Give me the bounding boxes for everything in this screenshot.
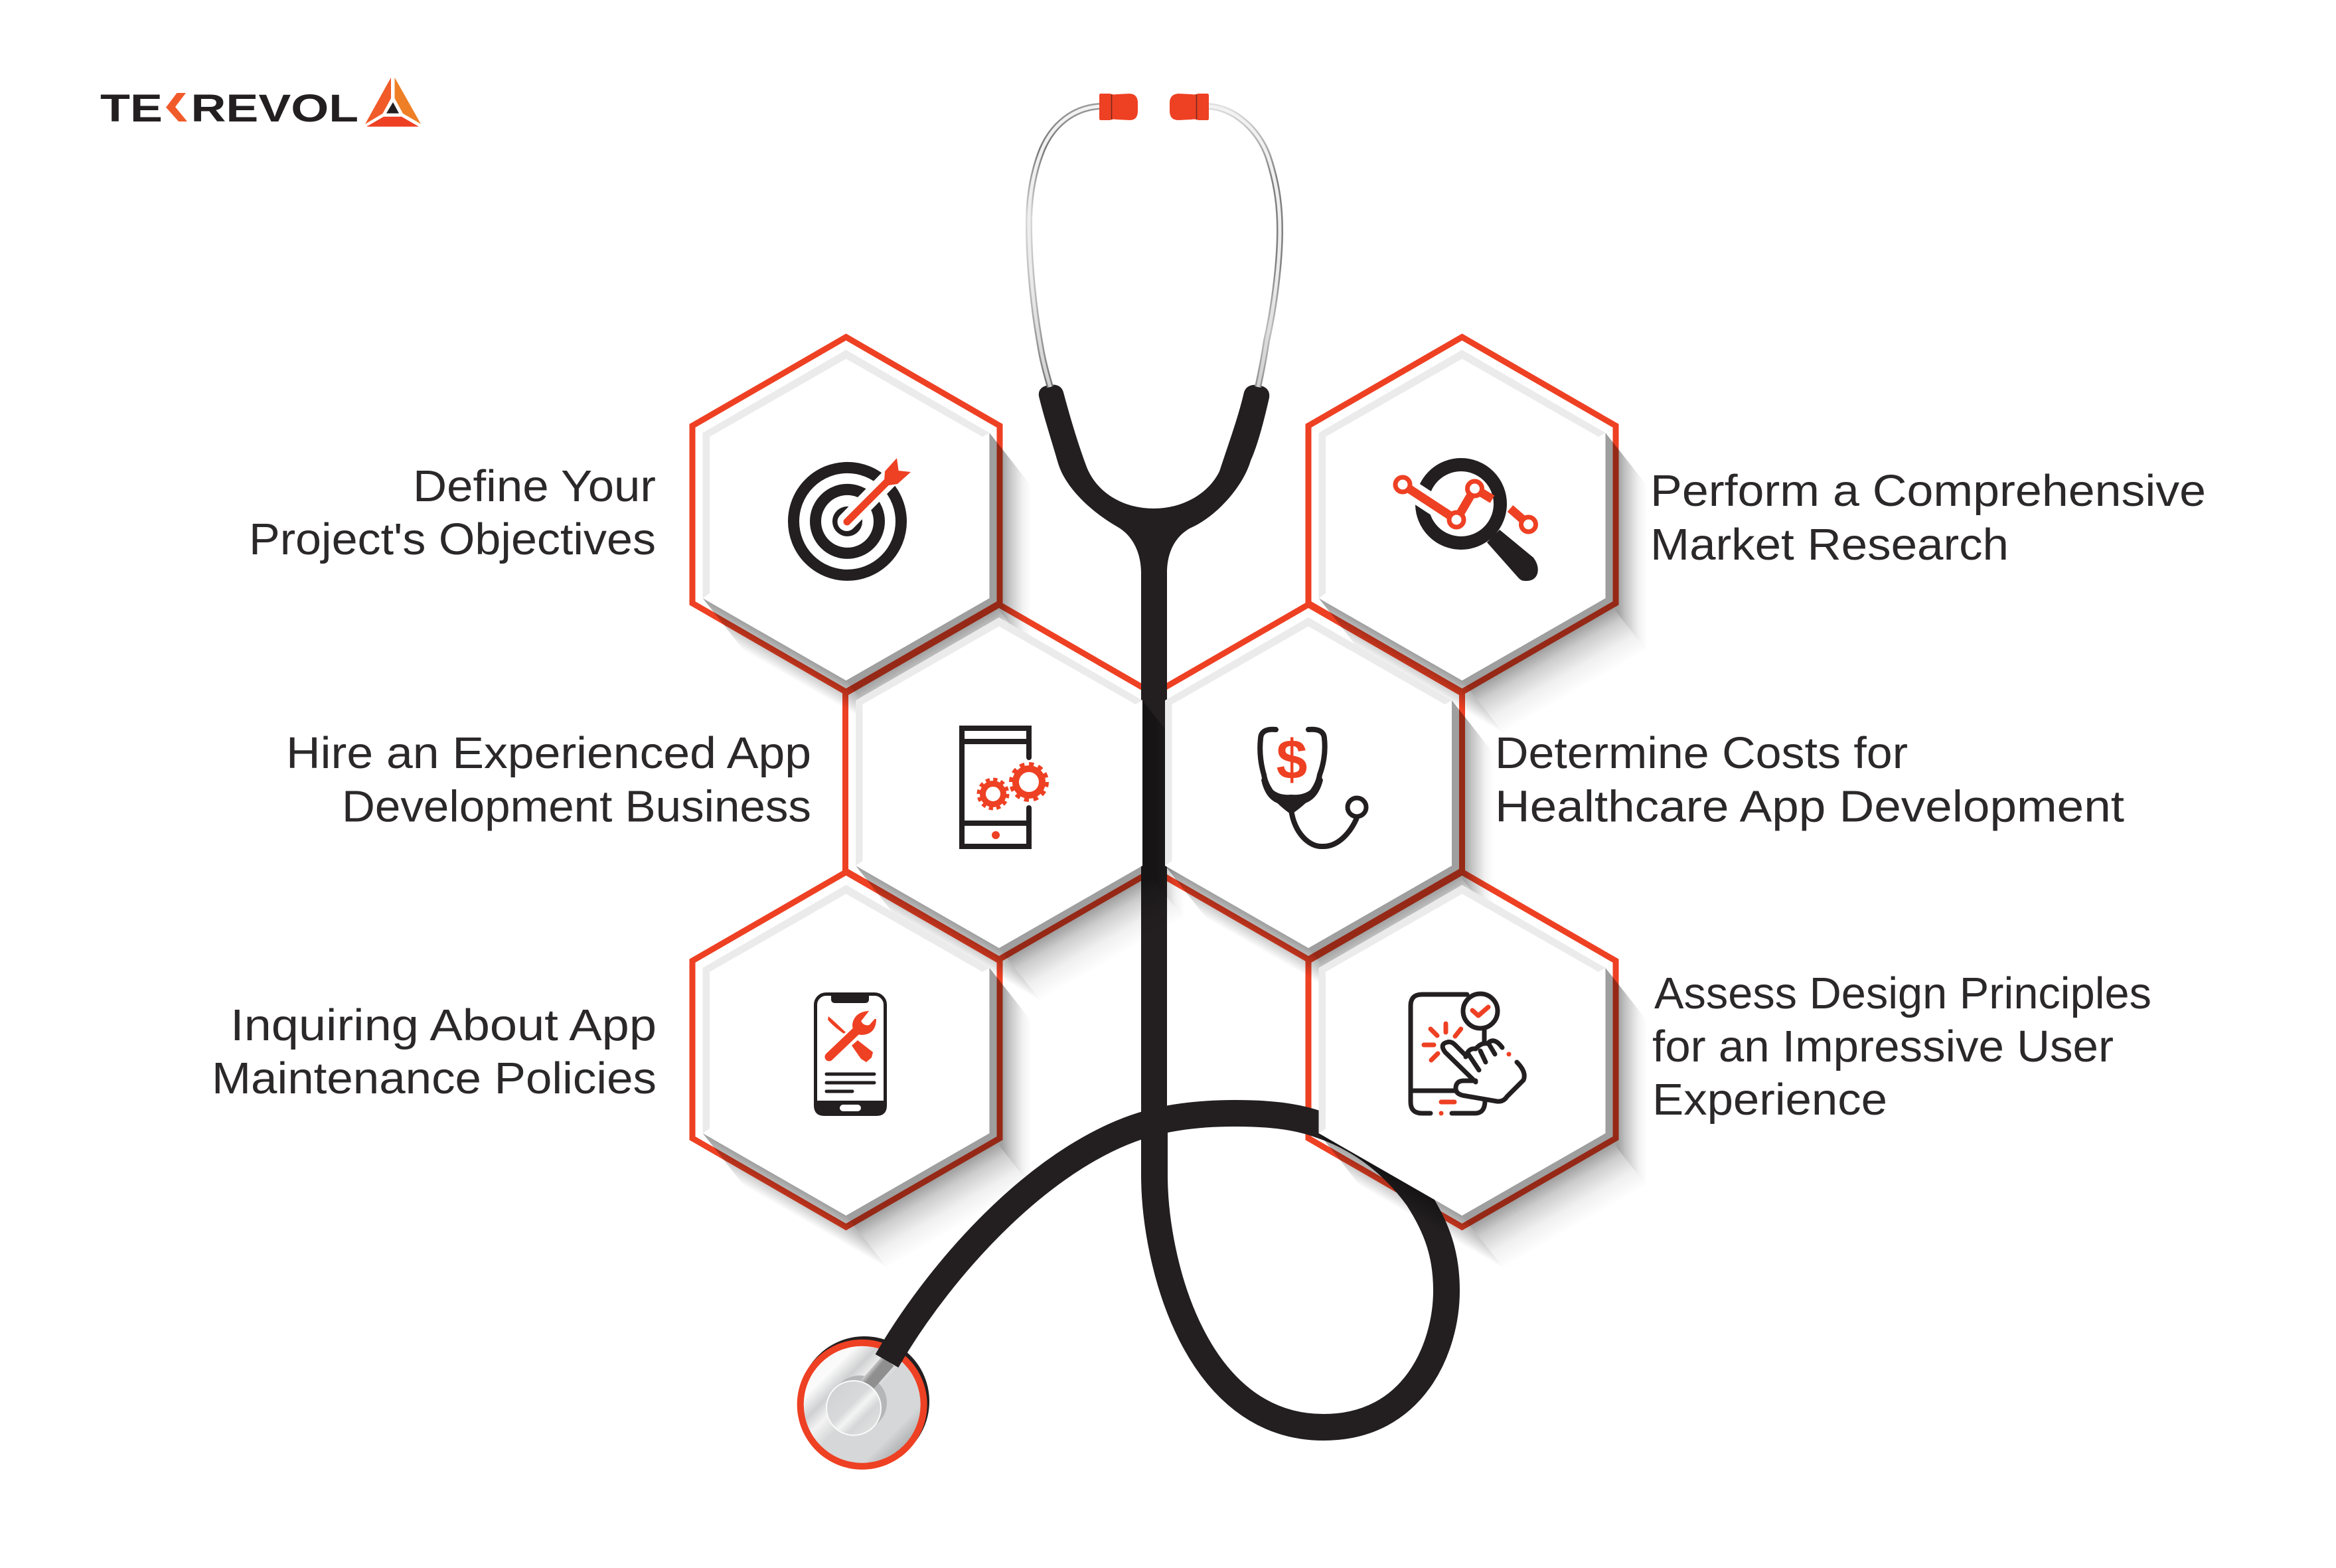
panel: hexagon market research: [1318, 350, 1605, 680]
label: Perform a Comprehensive Market Research: [1650, 466, 2206, 570]
panel: hexagon hire business: [856, 617, 1142, 948]
label: Hire an Experienced App Development Business: [286, 728, 811, 831]
label: Inquiring About App Maintenance Policies: Maintenance Policies: [212, 1054, 657, 1103]
label: Inquiring About App Maintenance Policies: [212, 1000, 657, 1103]
headset wires and ear tips: [1029, 94, 1280, 387]
icon: target with arrow: [794, 458, 911, 575]
label: Hire an Experienced App Development Business: Development Business: [342, 782, 811, 831]
icon: stethoscope with dollar sign: $: [1277, 728, 1307, 791]
label: Define Your Project's Objectives: Define Your: [413, 461, 656, 511]
panel: hexagon design principles: [1318, 885, 1605, 1215]
label: Assess Design Principles for an Impressive User Experience: [1652, 969, 2151, 1125]
label: Determine Costs for Healthcare App Development: [1495, 728, 2124, 831]
label: Determine Costs for Healthcare App Development: Healthcare App Development: [1495, 782, 2124, 831]
panel: hexagon determine costs: [1165, 617, 1452, 948]
label: Define Your Project's Objectives: [249, 461, 656, 564]
stethoscope tubing: [887, 384, 1446, 1427]
icon: magnifier with line chart: [1395, 465, 1538, 581]
label: Hire an Experienced App Development Business: Hire an Experienced App: [286, 728, 811, 778]
panel: hexagon maintenance: [702, 885, 989, 1215]
label: Assess Design Principles for an Impressive User Experience: for an Impressive User: [1652, 1022, 2114, 1071]
icon: phone with wrench and screwdriver: [814, 994, 887, 1116]
logo: TekRevol: [100, 78, 421, 130]
logo: TekRevol: REVOL: [191, 87, 358, 130]
icon: phone with gears: [962, 728, 1046, 846]
label: Perform a Comprehensive Market Research: Market Research: [1650, 520, 2009, 570]
label: Define Your Project's Objectives: Project's Objectives: [249, 514, 656, 564]
panel: hexagon define objectives: [702, 350, 989, 680]
icon: stethoscope with dollar sign: [1260, 728, 1366, 846]
label: Perform a Comprehensive Market Research: Perform a Comprehensive: [1650, 466, 2206, 516]
label: Assess Design Principles for an Impressive User Experience: Assess Design Principles: [1654, 969, 2151, 1018]
label: Determine Costs for Healthcare App Development: Determine Costs for: [1495, 728, 1908, 778]
icon: hand tapping phone with check mark: [1411, 994, 1524, 1115]
label: Inquiring About App Maintenance Policies: Inquiring About App: [230, 1000, 657, 1050]
label: Assess Design Principles for an Impressive User Experience: Experience: [1652, 1075, 1887, 1125]
hexagon red outlines: [692, 337, 1616, 1227]
stethoscope chest piece: [797, 1336, 929, 1470]
logo: TekRevol: TE: [100, 87, 163, 130]
hexagon drop shadows: [702, 433, 1648, 1269]
